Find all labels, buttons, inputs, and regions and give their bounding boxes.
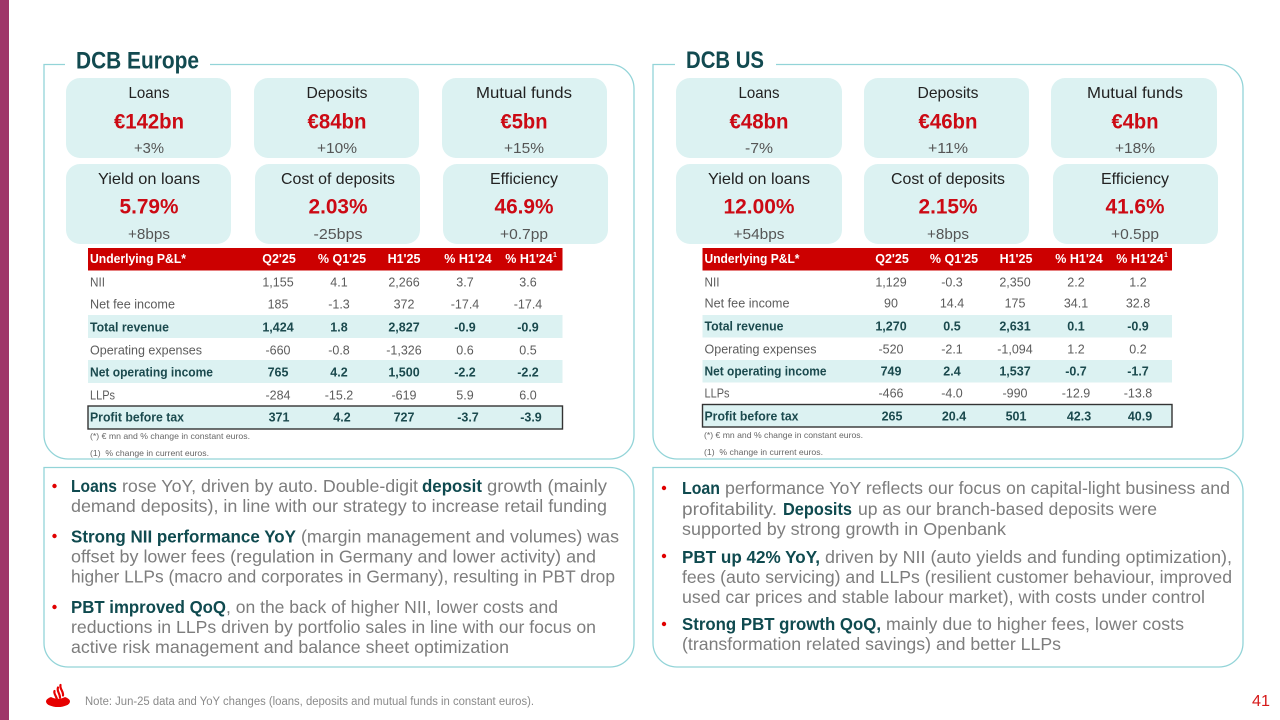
table header: 1 (1164, 252, 1168, 259)
row: total revenue: 2,631 (999, 320, 1031, 334)
footnotes (704, 430, 863, 457)
row: net fee income: 34.1 (1064, 296, 1088, 310)
row: net fee income: Net fee income (90, 298, 175, 312)
row: total revenue (90, 320, 539, 334)
row: total revenue: Total revenue (90, 320, 169, 334)
bullet: PBT QoQ: reductions in LLPs driven by portfolio sales in line with our focus on (71, 617, 596, 637)
KPI: yield on loans: +8bps (128, 227, 170, 243)
bullet: loan performance: Loan (682, 478, 720, 498)
row: net fee income: 32.8 (1126, 296, 1150, 310)
row: profit before tax: 265 (882, 410, 902, 424)
row: operating expenses: -1,326 (386, 344, 422, 358)
table header: % H1'24 (444, 252, 492, 266)
KPI: yield on loans (676, 164, 842, 244)
bullet: loan performance: up as our branch-based deposits were (858, 499, 1157, 519)
table header: H1'25 (388, 252, 420, 266)
sidebar accent (0, 0, 9, 720)
row: net fee income: -17.4 (514, 298, 542, 312)
KPI: yield on loans: 12.00% (724, 196, 795, 218)
heading: DCB Europe: DCB Europe (76, 48, 199, 74)
KPI: cost of deposits (255, 164, 420, 244)
row: LLPs: -619 (391, 388, 417, 402)
row: net fee income: 14.4 (940, 296, 964, 310)
row: NII: 3.7 (456, 276, 474, 290)
panel: DCB Europe (44, 48, 634, 459)
table header: Q2'25 (875, 252, 909, 266)
bullet: PBT QoQ: (transformation related savings) and better LLPs (682, 634, 1061, 654)
table header: % H1'24 (505, 252, 553, 266)
KPI: loans: €48bn (730, 110, 788, 134)
KPI: yield on loans: 5.79% (120, 196, 179, 218)
row: net fee income: 90 (884, 296, 898, 310)
heading: DCB US: DCB US (686, 47, 764, 74)
table header: % H1'24 (1116, 252, 1164, 266)
KPI: cost of deposits: Cost of deposits (891, 171, 1005, 188)
row: total revenue: 1,424 (262, 320, 294, 334)
row: total revenue (704, 320, 1149, 334)
KPI: deposits (864, 78, 1029, 158)
KPI: deposits: Deposits (306, 85, 368, 102)
row: total revenue: 2,827 (388, 320, 420, 334)
icon: Santander flame logo (46, 685, 70, 707)
KPI: cost of deposits: +8bps (927, 227, 969, 243)
KPI: loans: -7% (745, 141, 773, 157)
footnote: data note: Note: Jun-25 data and YoY changes (loans, deposits and mutual funds in constant euros). (85, 696, 534, 708)
row: operating expenses: -660 (265, 344, 291, 358)
row: total revenue: 1,270 (875, 320, 907, 334)
row: LLPs: 5.9 (456, 388, 474, 402)
table header: Underlying P&L* (704, 252, 800, 266)
row: net operating income: 1,537 (999, 364, 1031, 378)
row: LLPs: LLPs (704, 386, 730, 400)
bullet: PBT YoY: PBT up 42% YoY, (682, 547, 820, 567)
row: net fee income: 185 (268, 298, 288, 312)
KPI: deposits: €84bn (308, 110, 366, 134)
row: total revenue: 0.5 (943, 320, 961, 334)
row: operating expenses (704, 342, 1147, 356)
row: profit before tax: 371 (269, 410, 289, 424)
row: NII: -0.3 (941, 276, 963, 290)
row: net operating income (704, 364, 1149, 378)
KPI: yield on loans: Yield on loans (708, 171, 810, 188)
row: LLPs: -466 (878, 386, 904, 400)
footnotes: (*) € mn and % change in constant euros. (90, 431, 250, 441)
KPI: cost of deposits (864, 164, 1029, 244)
bullet: NII performance (52, 526, 619, 586)
row: net operating income: -0.7 (1065, 364, 1087, 378)
bullet: PBT QoQ (662, 614, 1184, 654)
footnotes (90, 431, 250, 458)
row: net fee income (90, 298, 542, 312)
row: profit before tax: 727 (394, 410, 414, 424)
row: total revenue: -0.9 (1127, 320, 1149, 334)
bullet: loan performance: supported by strong growth in Openbank (682, 519, 1006, 539)
bullet: loans and deposits: Loans (71, 476, 117, 496)
KPI: efficiency: 46.9% (494, 196, 554, 218)
KPI: deposits: €46bn (918, 110, 978, 134)
KPI: mutual funds: +15% (504, 141, 544, 157)
KPI: mutual funds: +18% (1115, 141, 1155, 157)
KPI: efficiency: 41.6% (1106, 196, 1165, 218)
bullet: PBT YoY (662, 547, 1232, 607)
bullet: loans and deposits: growth (mainly (487, 476, 607, 496)
row: LLPs: 6.0 (519, 388, 537, 402)
bullet: PBT YoY: fees (auto servicing) and LLPs (resilient customer behaviour, improved (682, 567, 1232, 587)
bullet: NII performance: offset by lower fees (regulation in Germany and lower activity) and (71, 546, 596, 566)
table header: Q2'25 (262, 252, 296, 266)
footnotes: (1) % change in current euros. (90, 448, 209, 458)
row: profit before tax: 4.2 (333, 410, 351, 424)
row: profit before tax: -3.7 (457, 410, 479, 424)
row: net fee income: 372 (394, 298, 414, 312)
row: NII: 1,129 (875, 276, 907, 290)
KPI: loans: Loans (128, 85, 170, 102)
KPI: efficiency: Efficiency (490, 171, 558, 188)
row: net operating income: 1,500 (388, 366, 420, 380)
row: LLPs (90, 388, 537, 402)
row: NII: 1,155 (262, 276, 294, 290)
row: total revenue: -0.9 (454, 320, 476, 334)
row: total revenue: -0.9 (517, 320, 539, 334)
row: net operating income: -2.2 (517, 366, 539, 380)
row: net operating income: -2.2 (454, 366, 476, 380)
bullet: PBT QoQ: , on the back of higher NII, lower costs and (226, 597, 558, 617)
KPI: mutual funds: €4bn (1112, 110, 1158, 134)
KPI: yield on loans: Yield on loans (98, 171, 200, 188)
row: profit before tax: 42.3 (1067, 410, 1091, 424)
bullet: PBT QoQ: active risk management and balance sheet optimization (71, 637, 509, 657)
row: NII (90, 276, 537, 290)
row: LLPs: -284 (265, 388, 291, 402)
row: profit before tax: Profit before tax (90, 410, 184, 424)
row: net fee income (704, 296, 1150, 310)
row: NII: 3.6 (519, 276, 537, 290)
KPI: loans (66, 78, 231, 158)
row: operating expenses: 0.2 (1129, 342, 1147, 356)
KPI: deposits: +10% (317, 141, 357, 157)
row: LLPs: LLPs (90, 388, 115, 402)
bullet: loan performance: performance YoY reflects our focus on capital-light business and (725, 478, 1230, 498)
KPI: efficiency: +0.5pp (1111, 227, 1159, 243)
bullet: PBT YoY: driven by NII (auto yields and funding optimization), (825, 547, 1232, 567)
row: profit before tax: 20.4 (942, 410, 966, 424)
bullet: loans and deposits: deposit (422, 476, 482, 496)
KPI: loans: €142bn (114, 110, 184, 134)
KPI: mutual funds: €5bn (500, 110, 548, 134)
bullet: loan performance: Deposits (783, 499, 852, 519)
row: net fee income: Net fee income (704, 296, 790, 310)
bullet: NII performance: Strong NII performance YoY (71, 526, 296, 546)
KPI: efficiency (443, 164, 608, 244)
row: net operating income: 749 (881, 364, 901, 378)
KPI: deposits (254, 78, 419, 158)
row: profit before tax (704, 410, 1152, 424)
row: net fee income: 175 (1005, 296, 1025, 310)
row: net fee income: -1.3 (328, 298, 350, 312)
row: profit before tax: Profit before tax (704, 410, 799, 424)
row: NII: 2,350 (999, 276, 1031, 290)
row: LLPs (704, 386, 1152, 400)
row: profit before tax: -3.9 (520, 410, 542, 424)
footnotes: (*) € mn and % change in constant euros. (704, 430, 863, 440)
bullet: loan performance: profitability. (682, 499, 777, 519)
row: operating expenses (90, 344, 537, 358)
bullet: PBT QoQ: mainly due to higher fees, lower costs (886, 614, 1184, 634)
KPI: loans: Loans (738, 85, 780, 102)
bullet: loan performance (662, 478, 1230, 539)
KPI: efficiency: +0.7pp (500, 227, 548, 243)
row: NII: 1.2 (1129, 276, 1147, 290)
KPI: cost of deposits: 2.03% (308, 196, 368, 218)
row: NII: 4.1 (330, 276, 348, 290)
table header: % H1'24 (1055, 252, 1103, 266)
KPI: mutual funds: Mutual funds (476, 85, 572, 102)
row: net operating income: 2.4 (943, 364, 961, 378)
row: net operating income: Net operating income (90, 366, 213, 380)
KPI: deposits: Deposits (918, 85, 978, 102)
row: operating expenses: 0.5 (519, 344, 537, 358)
KPI: mutual funds (442, 78, 607, 158)
KPI: efficiency (1053, 164, 1218, 244)
row: profit before tax: 40.9 (1128, 410, 1152, 424)
table header: 1 (553, 252, 557, 259)
panel: US commentary (653, 468, 1243, 667)
panel: Europe commentary (44, 468, 634, 667)
table header (90, 252, 557, 266)
bullet: PBT QoQ (52, 597, 596, 657)
row: net operating income: Net operating income (704, 364, 827, 378)
KPI: mutual funds: Mutual funds (1087, 85, 1183, 102)
bullet: loans and deposits: demand deposits), in line with our strategy to increase retail funding (71, 496, 607, 516)
row: net operating income: 4.2 (330, 366, 348, 380)
KPI: yield on loans (66, 164, 231, 244)
KPI: loans (676, 78, 842, 158)
row: profit before tax: 501 (1006, 410, 1026, 424)
row: net operating income (90, 366, 539, 380)
row: NII: NII (90, 276, 105, 290)
row: LLPs: -15.2 (325, 388, 353, 402)
table header (704, 252, 1168, 266)
table header: % Q1'25 (930, 252, 978, 266)
row: operating expenses: 0.6 (456, 344, 474, 358)
row: total revenue: 1.8 (330, 320, 348, 334)
KPI: deposits: +11% (928, 141, 968, 157)
table header: % Q1'25 (318, 252, 366, 266)
bullet: PBT YoY: used car prices and stable labour market), with costs under control (682, 587, 1205, 607)
KPI: cost of deposits: Cost of deposits (281, 171, 395, 188)
row: LLPs: -12.9 (1062, 386, 1090, 400)
bullet: NII performance: higher LLPs (macro and corporates in Germany), resulting in PBT drop (71, 566, 615, 586)
row: operating expenses: -520 (878, 342, 904, 356)
row: NII: 2.2 (1067, 276, 1085, 290)
table header: H1'25 (1000, 252, 1032, 266)
row: NII: NII (704, 276, 720, 290)
table: underlying P&L Europe (88, 248, 562, 429)
row: net operating income: 765 (268, 366, 288, 380)
footnotes: (1) % change in current euros. (704, 447, 823, 457)
KPI: efficiency: Efficiency (1101, 171, 1169, 188)
row: LLPs: -13.8 (1124, 386, 1152, 400)
KPI: loans: +3% (134, 141, 164, 157)
KPI: mutual funds (1051, 78, 1217, 158)
row: net fee income: -17.4 (451, 298, 479, 312)
row: operating expenses: 1.2 (1067, 342, 1085, 356)
row: operating expenses: Operating expenses (90, 344, 202, 358)
bullet: NII performance: (margin management and volumes) was (301, 526, 619, 546)
KPI: yield on loans: +54bps (734, 227, 784, 243)
table header: Underlying P&L* (90, 252, 186, 266)
row: operating expenses: Operating expenses (704, 342, 816, 356)
row: operating expenses: -0.8 (328, 344, 350, 358)
row: LLPs: -4.0 (941, 386, 963, 400)
panel: DCB US (653, 47, 1243, 459)
row: operating expenses: -1,094 (997, 342, 1033, 356)
table: underlying P&L US (702, 248, 1172, 427)
row: operating expenses: -2.1 (941, 342, 963, 356)
row: NII (704, 276, 1147, 290)
row: profit before tax (90, 410, 542, 424)
row: LLPs: -990 (1002, 386, 1028, 400)
bullet: PBT QoQ: Strong PBT growth QoQ, (682, 614, 881, 634)
row: net operating income: -1.7 (1127, 364, 1149, 378)
row: total revenue: 0.1 (1067, 320, 1085, 334)
page number: 41 (1252, 693, 1270, 710)
bullet: PBT QoQ: PBT improved QoQ (71, 597, 226, 617)
KPI: cost of deposits: 2.15% (918, 196, 978, 218)
KPI: cost of deposits: -25bps (314, 227, 362, 243)
bullet: loans and deposits (52, 476, 607, 516)
bullet: loans and deposits: rose YoY, driven by auto. Double-digit (122, 476, 418, 496)
row: total revenue: Total revenue (704, 320, 784, 334)
row: NII: 2,266 (388, 276, 420, 290)
